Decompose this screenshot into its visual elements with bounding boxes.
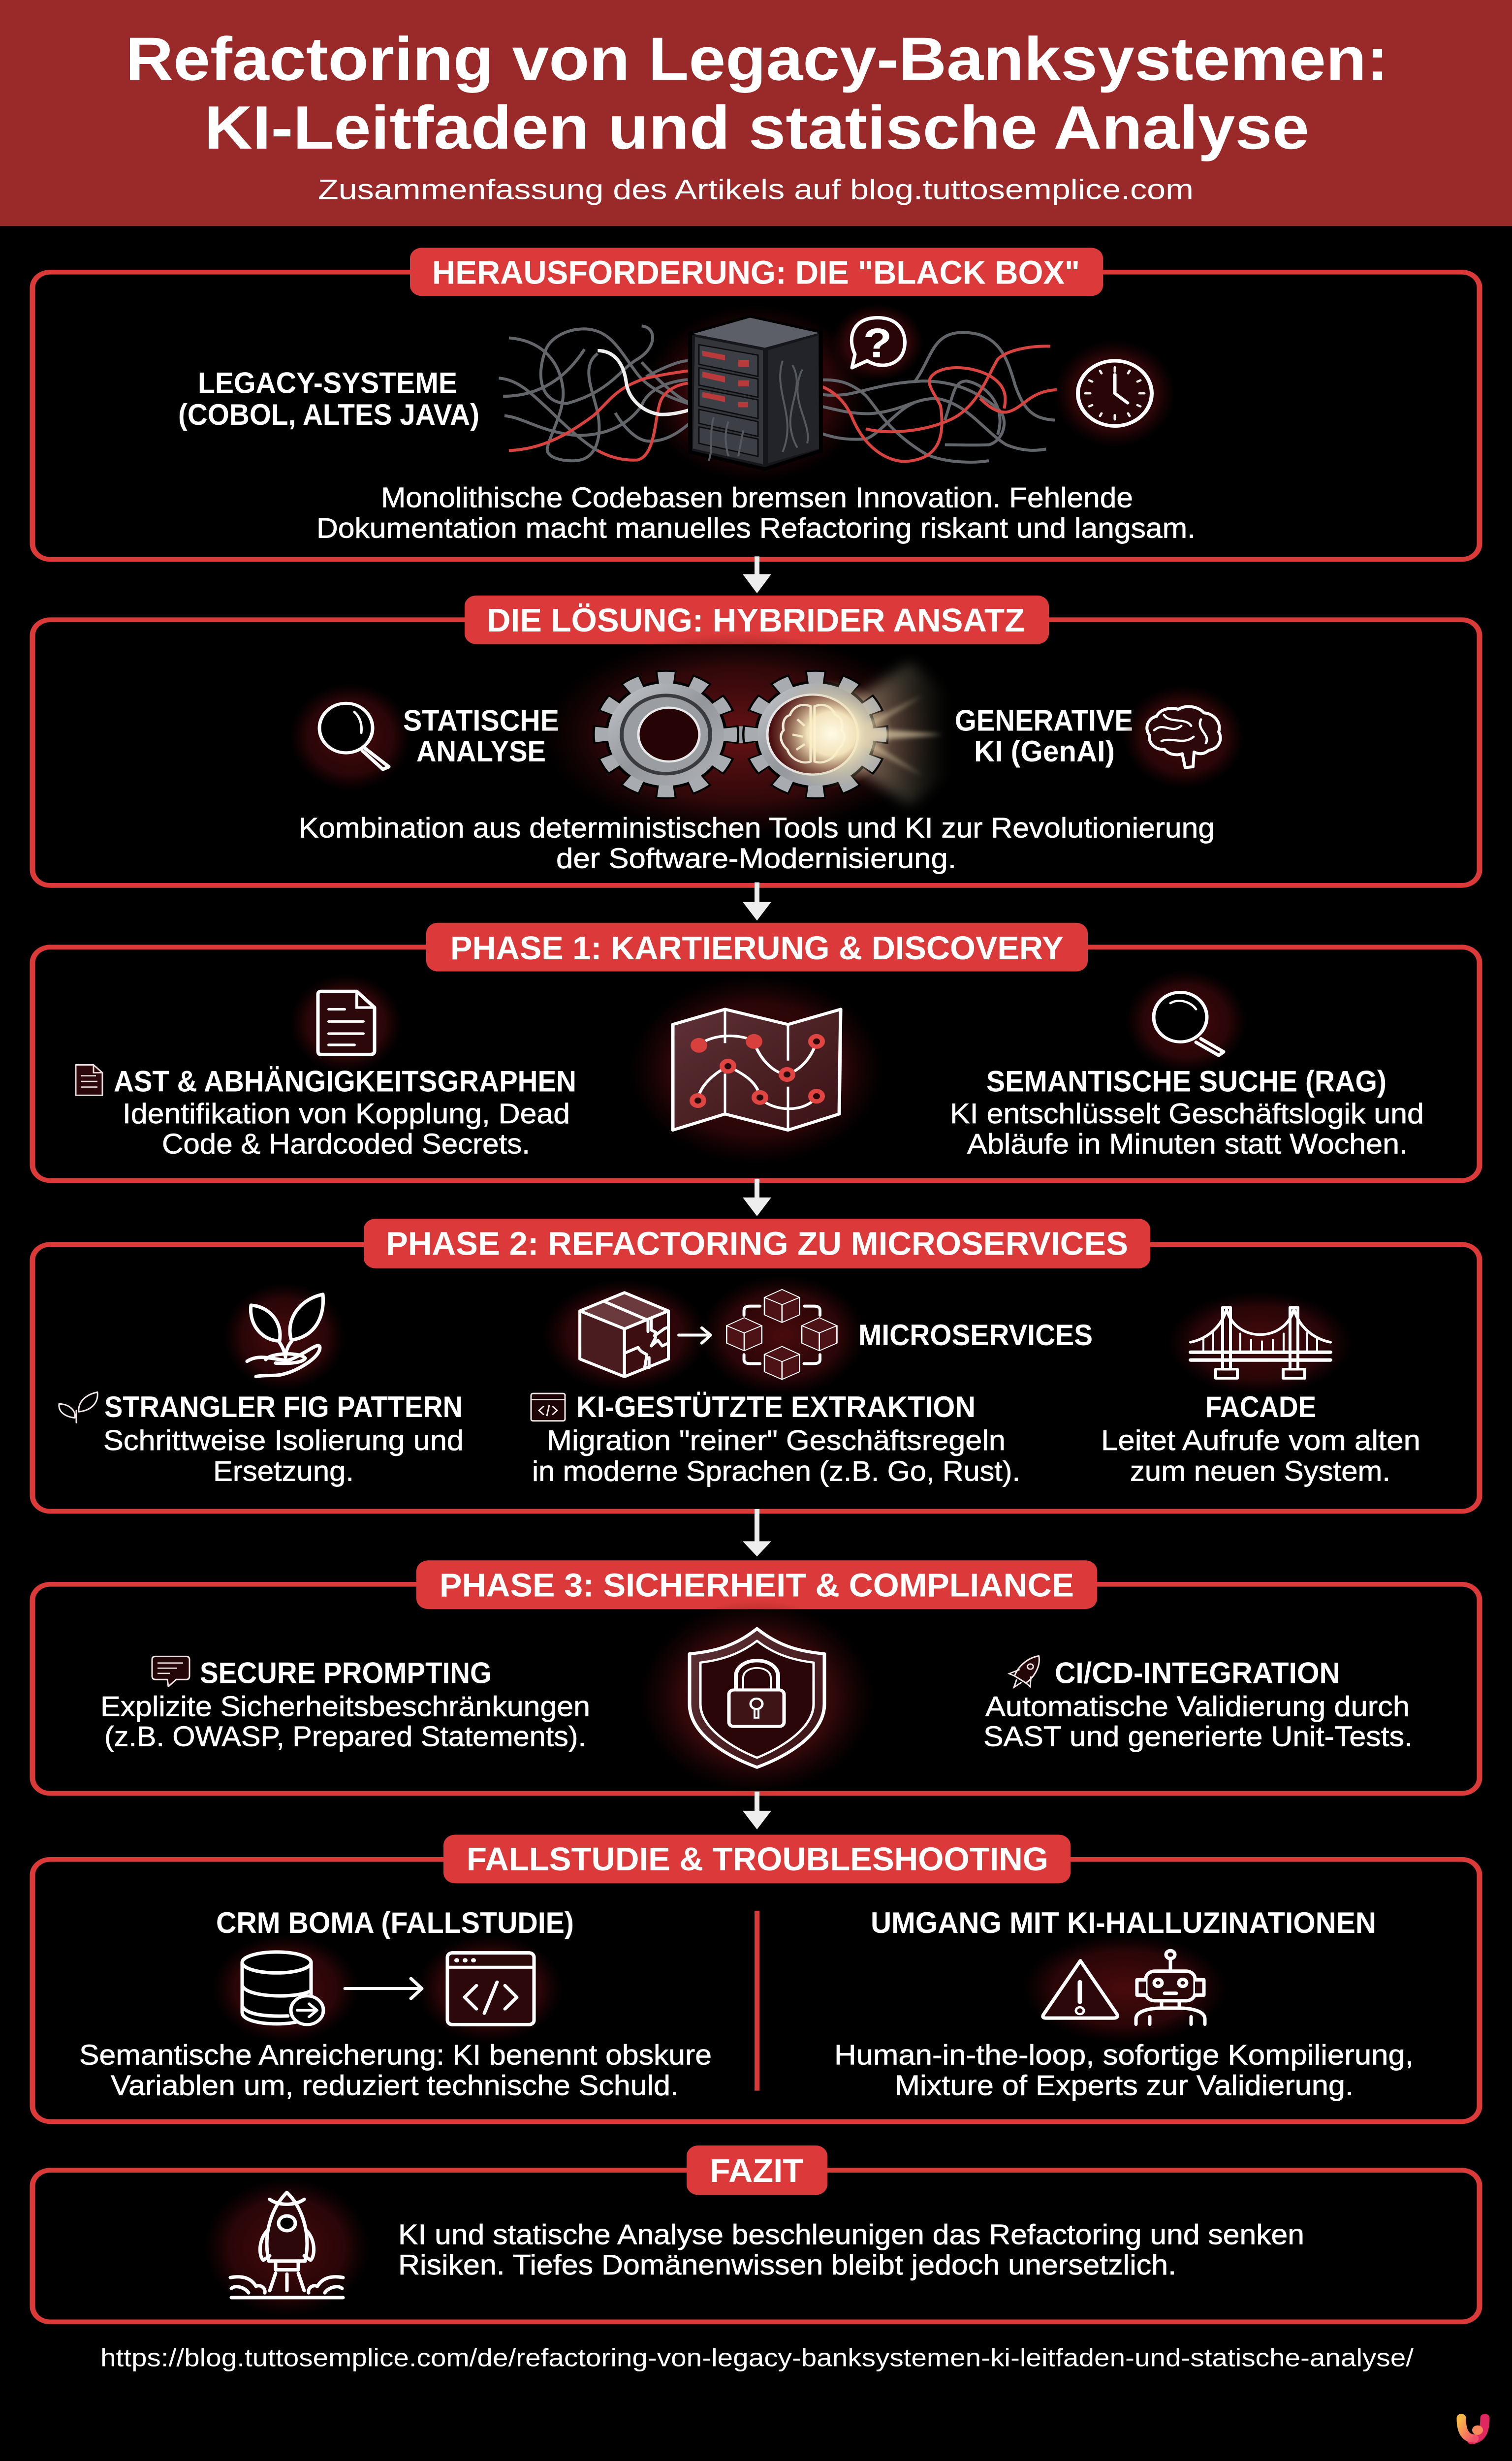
description text: Kombination aus deterministischen Tools und KI zur Revolutionierung [299,812,1215,844]
column: facade [1101,1390,1420,1487]
label: microservices: MICROSERVICES [858,1319,1093,1352]
heading badge: PHASE 2: REFACTORING ZU MICROSERVICES [386,1226,1128,1262]
description text [316,481,1196,544]
body text: zum neuen System. [1130,1455,1390,1487]
icon: warning and robot [1021,1934,1228,2043]
divider [755,1911,759,2091]
column: CI/CD [983,1649,1413,1752]
panel: Fallstudie [32,1834,1480,2121]
arrow [743,1792,771,1830]
subheading: KI-GESTÜTZTE EXTRAKTION [576,1390,976,1423]
panel: Herausforderung [32,248,1480,560]
icon: bridge [1166,1291,1354,1395]
heading badge [426,923,1088,972]
body text [100,1690,590,1752]
label: legacy systems [178,366,479,431]
panel frame [32,1860,1480,2121]
panel frame [32,1244,1480,1511]
subheading: CRM BOMA (FALLSTUDIE) [216,1906,574,1939]
icon: magnifier [1125,969,1248,1073]
heading badge: FALLSTUDIE & TROUBLESHOOTING [467,1841,1048,1878]
label: legacy systems: (COBOL, ALTES JAVA) [178,398,479,431]
heading badge [364,1219,1150,1268]
body text [834,2039,1414,2101]
description text: der Software-Modernisierung. [556,842,956,874]
body text: in moderne Sprachen (z.B. Go, Rust). [532,1455,1020,1487]
description text: Dokumentation macht manuelles Refactoring riskant und langsam. [316,512,1196,544]
body text: SAST und generierte Unit-Tests. [983,1720,1413,1752]
body text: Code & Hardcoded Secrets. [162,1128,530,1160]
icon: question bubble [831,303,924,381]
panel: Phase 2 [32,1219,1480,1511]
column: secure prompting [100,1656,590,1752]
heading badge [416,1560,1097,1609]
body text [103,1424,464,1487]
label: static analysis [403,704,559,768]
heading badge: HERAUSFORDERUNG: DIE "BLACK BOX" [432,254,1080,291]
label: generative AI [955,704,1133,768]
body text: (z.B. OWASP, Prepared Statements). [104,1720,586,1752]
body text: Abläufe in Minuten statt Wochen. [967,1128,1408,1160]
heading badge: FAZIT [710,2152,803,2189]
icon: shield with lock [639,1600,875,1795]
body text: Automatische Validierung durch [985,1690,1410,1722]
body text [532,1424,1020,1487]
panel frame [32,620,1480,885]
body text [1101,1424,1420,1487]
heading badge: PHASE 1: KARTIERUNG & DISCOVERY [450,930,1064,967]
panel frame [32,1584,1480,1794]
panel: Phase 1 [32,923,1480,1180]
description text: Monolithische Codebasen bremsen Innovation. Fehlende [381,481,1133,513]
subheading: FACADE [1205,1390,1316,1423]
body text: Ersetzung. [213,1455,354,1487]
body text [950,1097,1424,1160]
icon: server with tangled wires [499,304,1057,482]
body text: Identifikation von Kopplung, Dead [123,1097,570,1129]
panel: Lösung [32,596,1480,885]
title [126,25,1388,162]
heading badge: PHASE 3: SICHERHEIT & COMPLIANCE [440,1567,1074,1604]
arrow [743,556,771,593]
heading badge [443,1834,1071,1883]
subheading: SEMANTISCHE SUCHE (RAG) [986,1065,1386,1098]
heading badge [687,2145,827,2195]
label: generative AI: GENERATIVE [955,704,1133,737]
panel: Phase 3 [32,1560,1480,1795]
body text: Leitet Aufrufe vom alten [1101,1424,1420,1456]
conclusion text [398,2218,1304,2280]
subheading: UMGANG MIT KI-HALLUZINATIONEN [871,1906,1376,1939]
column: semantic search [950,969,1424,1160]
heading badge: DIE LÖSUNG: HYBRIDER ANSATZ [487,602,1025,639]
label: static analysis: ANALYSE [416,735,546,768]
icon: small plant [59,1392,97,1422]
subheading: SECURE PROMPTING [200,1656,492,1689]
body text [79,2039,712,2101]
icon: brain [1122,685,1245,789]
label: legacy systems: LEGACY-SYSTEME [198,366,457,399]
body text: Mixture of Experts zur Validierung. [895,2069,1354,2101]
panel: Fazit [32,2145,1480,2322]
icon: map with nodes [629,974,884,1165]
panel frame [32,272,1480,560]
body text [983,1690,1413,1752]
header band [0,0,1512,226]
subheading: CI/CD-INTEGRATION [1055,1656,1340,1689]
body text: Schrittweise Isolierung und [103,1424,464,1456]
conclusion text: KI und statische Analyse beschleunigen das Refactoring und senken [398,2218,1304,2250]
arrow [743,883,771,920]
heading badge [465,596,1049,644]
icon: monolith to microservices [541,1274,866,1396]
body text: Explizite Sicherheitsbeschränkungen [100,1690,590,1722]
icon: question bubble: ? [863,320,892,367]
body text: Variablen um, reduziert technische Schuld. [111,2069,679,2101]
body text: Human-in-the-loop, sofortige Kompilierung, [834,2039,1414,2071]
heading badge [410,248,1103,296]
icon: plant in hand [223,1282,346,1391]
subheading: STRANGLER FIG PATTERN [104,1390,463,1423]
description text [299,812,1215,874]
icon: chat bubble [152,1656,189,1686]
body text: Semantische Anreicherung: KI benennt obskure [79,2039,712,2071]
body text: KI entschlüsselt Geschäftslogik und [950,1097,1424,1129]
conclusion text: Risiken. Tiefes Domänenwissen bleibt jedoch unersetzlich. [398,2249,1176,2280]
column: AI extraction [531,1390,1020,1487]
label: static analysis: STATISCHE [403,704,559,737]
body text [123,1097,570,1160]
body text: Migration "reiner" Geschäftsregeln [547,1424,1006,1456]
title: KI-Leitfaden und statische Analyse [204,94,1309,162]
label: generative AI: KI (GenAI) [974,735,1115,768]
icon: rocket launch [203,2177,371,2317]
icon: magnifier [289,682,412,791]
column: strangler fig [59,1390,464,1487]
panel frame [32,947,1480,1180]
icon: small document [76,1065,102,1095]
subtitle: Zusammenfassung des Artikels auf blog.tuttosemplice.com [318,173,1194,205]
column: hallucinations [834,1906,1414,2101]
icon: small rocket [1004,1649,1049,1694]
column: AST [76,1065,576,1160]
source url: https://blog.tuttosemplice.com/de/refactoring-von-legacy-banksystemen-ki-leitfaden-und-statische-analyse/ [100,2343,1414,2372]
icon: clock [1053,339,1176,448]
title: Refactoring von Legacy-Banksystemen: [126,25,1388,94]
logo [1461,2418,1485,2440]
column: case study [79,1906,712,2101]
arrow [743,1509,771,1556]
arrow [743,1179,771,1216]
panel frame [32,2170,1480,2322]
subheading: AST & ABHÄNGIGKEITSGRAPHEN [114,1065,576,1098]
icon: interlocked gears with brain [541,632,947,837]
icon: document [289,974,403,1073]
icon: database to code [212,1934,564,2043]
icon: small code window [531,1393,565,1421]
